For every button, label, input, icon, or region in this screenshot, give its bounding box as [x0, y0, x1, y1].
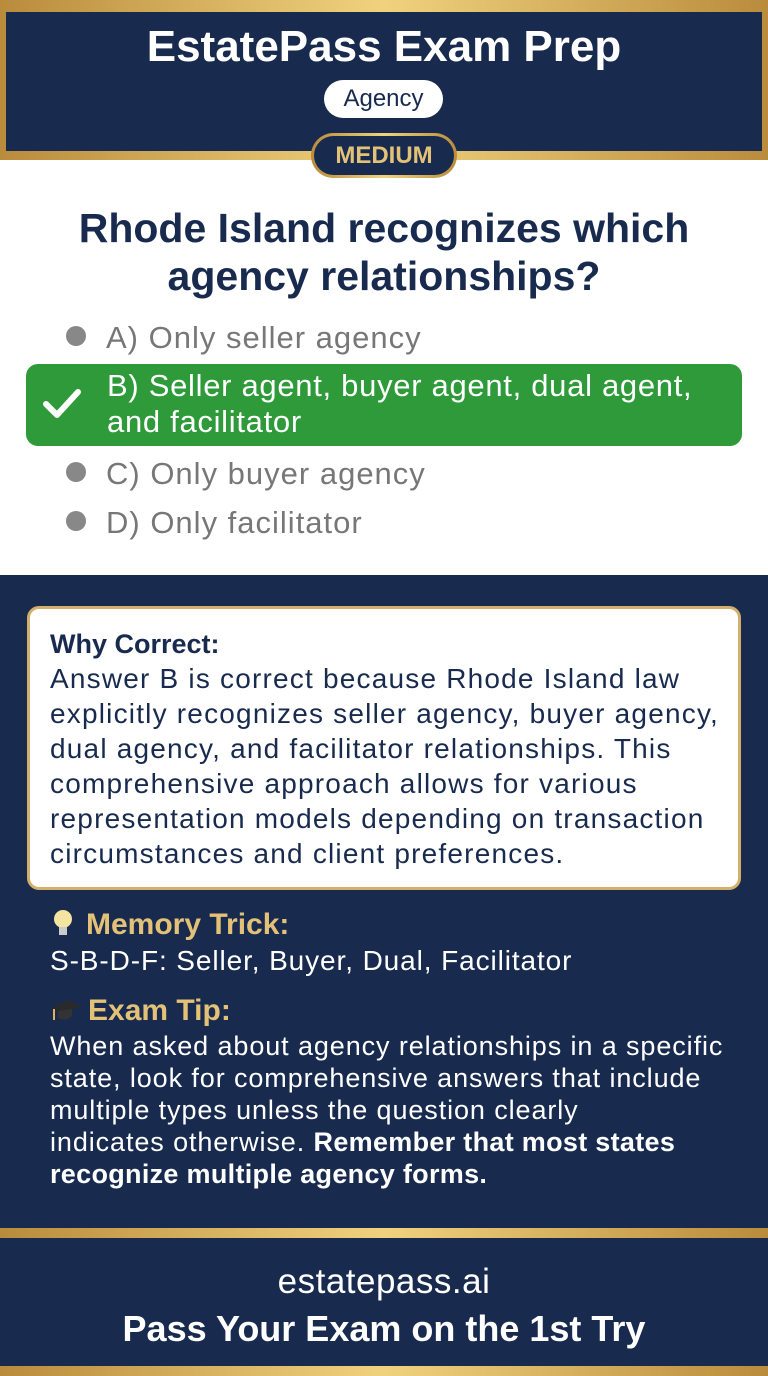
exam tip block	[50, 994, 723, 1189]
header panel	[0, 0, 768, 160]
title: EstatePass Exam Prep	[147, 22, 621, 71]
heading: exam tip: Exam Tip:	[88, 994, 231, 1027]
exam tip text: indicates otherwise. Remember that most states	[50, 1127, 675, 1157]
exam tip text: state, look for comprehensive answers that include	[50, 1063, 701, 1093]
option A: A) Only seller agency	[106, 320, 422, 355]
footer tagline: Pass Your Exam on the 1st Try	[123, 1308, 645, 1349]
option C: C) Only buyer agency	[106, 456, 426, 491]
difficulty badge: MEDIUM	[335, 142, 433, 169]
exam tip text: recognize multiple agency forms.	[50, 1159, 487, 1189]
footer url: estatepass.ai	[278, 1262, 490, 1301]
option B correct: B) Seller agent, buyer agent, dual agent,	[107, 368, 692, 403]
heading: why correct: Why Correct:	[50, 629, 220, 659]
icon: check	[43, 389, 81, 418]
white question section	[0, 160, 768, 575]
question heading: Rhode Island recognizes which	[79, 205, 689, 251]
memory trick text: S-B-D-F: Seller, Buyer, Dual, Facilitator	[50, 945, 572, 976]
question heading	[79, 205, 689, 299]
exam tip text: multiple types unless the question clearly	[50, 1095, 579, 1125]
footer	[0, 1228, 768, 1376]
panel: why correct	[27, 606, 741, 890]
category pill	[324, 80, 443, 118]
option B correct: and facilitator	[107, 404, 302, 439]
explanation text: explicitly recognizes seller agency, buyer agency,	[50, 698, 719, 729]
explanation text: representation models depending on transaction	[50, 803, 704, 834]
question heading: agency relationships?	[168, 253, 600, 299]
exam tip text	[50, 1031, 723, 1189]
category pill: Agency	[343, 85, 424, 112]
explanation text: dual agency, and facilitator relationships. This	[50, 733, 672, 764]
exam tip text: When asked about agency relationships in a specific	[50, 1031, 723, 1061]
explanation text	[50, 663, 719, 869]
option B correct	[26, 364, 742, 446]
heading: memory trick: Memory Trick:	[86, 908, 289, 941]
option D: D) Only facilitator	[106, 505, 363, 540]
explanation text: Answer B is correct because Rhode Island law	[50, 663, 680, 694]
explanation text: comprehensive approach allows for various	[50, 768, 638, 799]
memory trick block	[50, 908, 572, 976]
difficulty badge	[311, 133, 457, 178]
explanation text: circumstances and client preferences.	[50, 838, 564, 869]
